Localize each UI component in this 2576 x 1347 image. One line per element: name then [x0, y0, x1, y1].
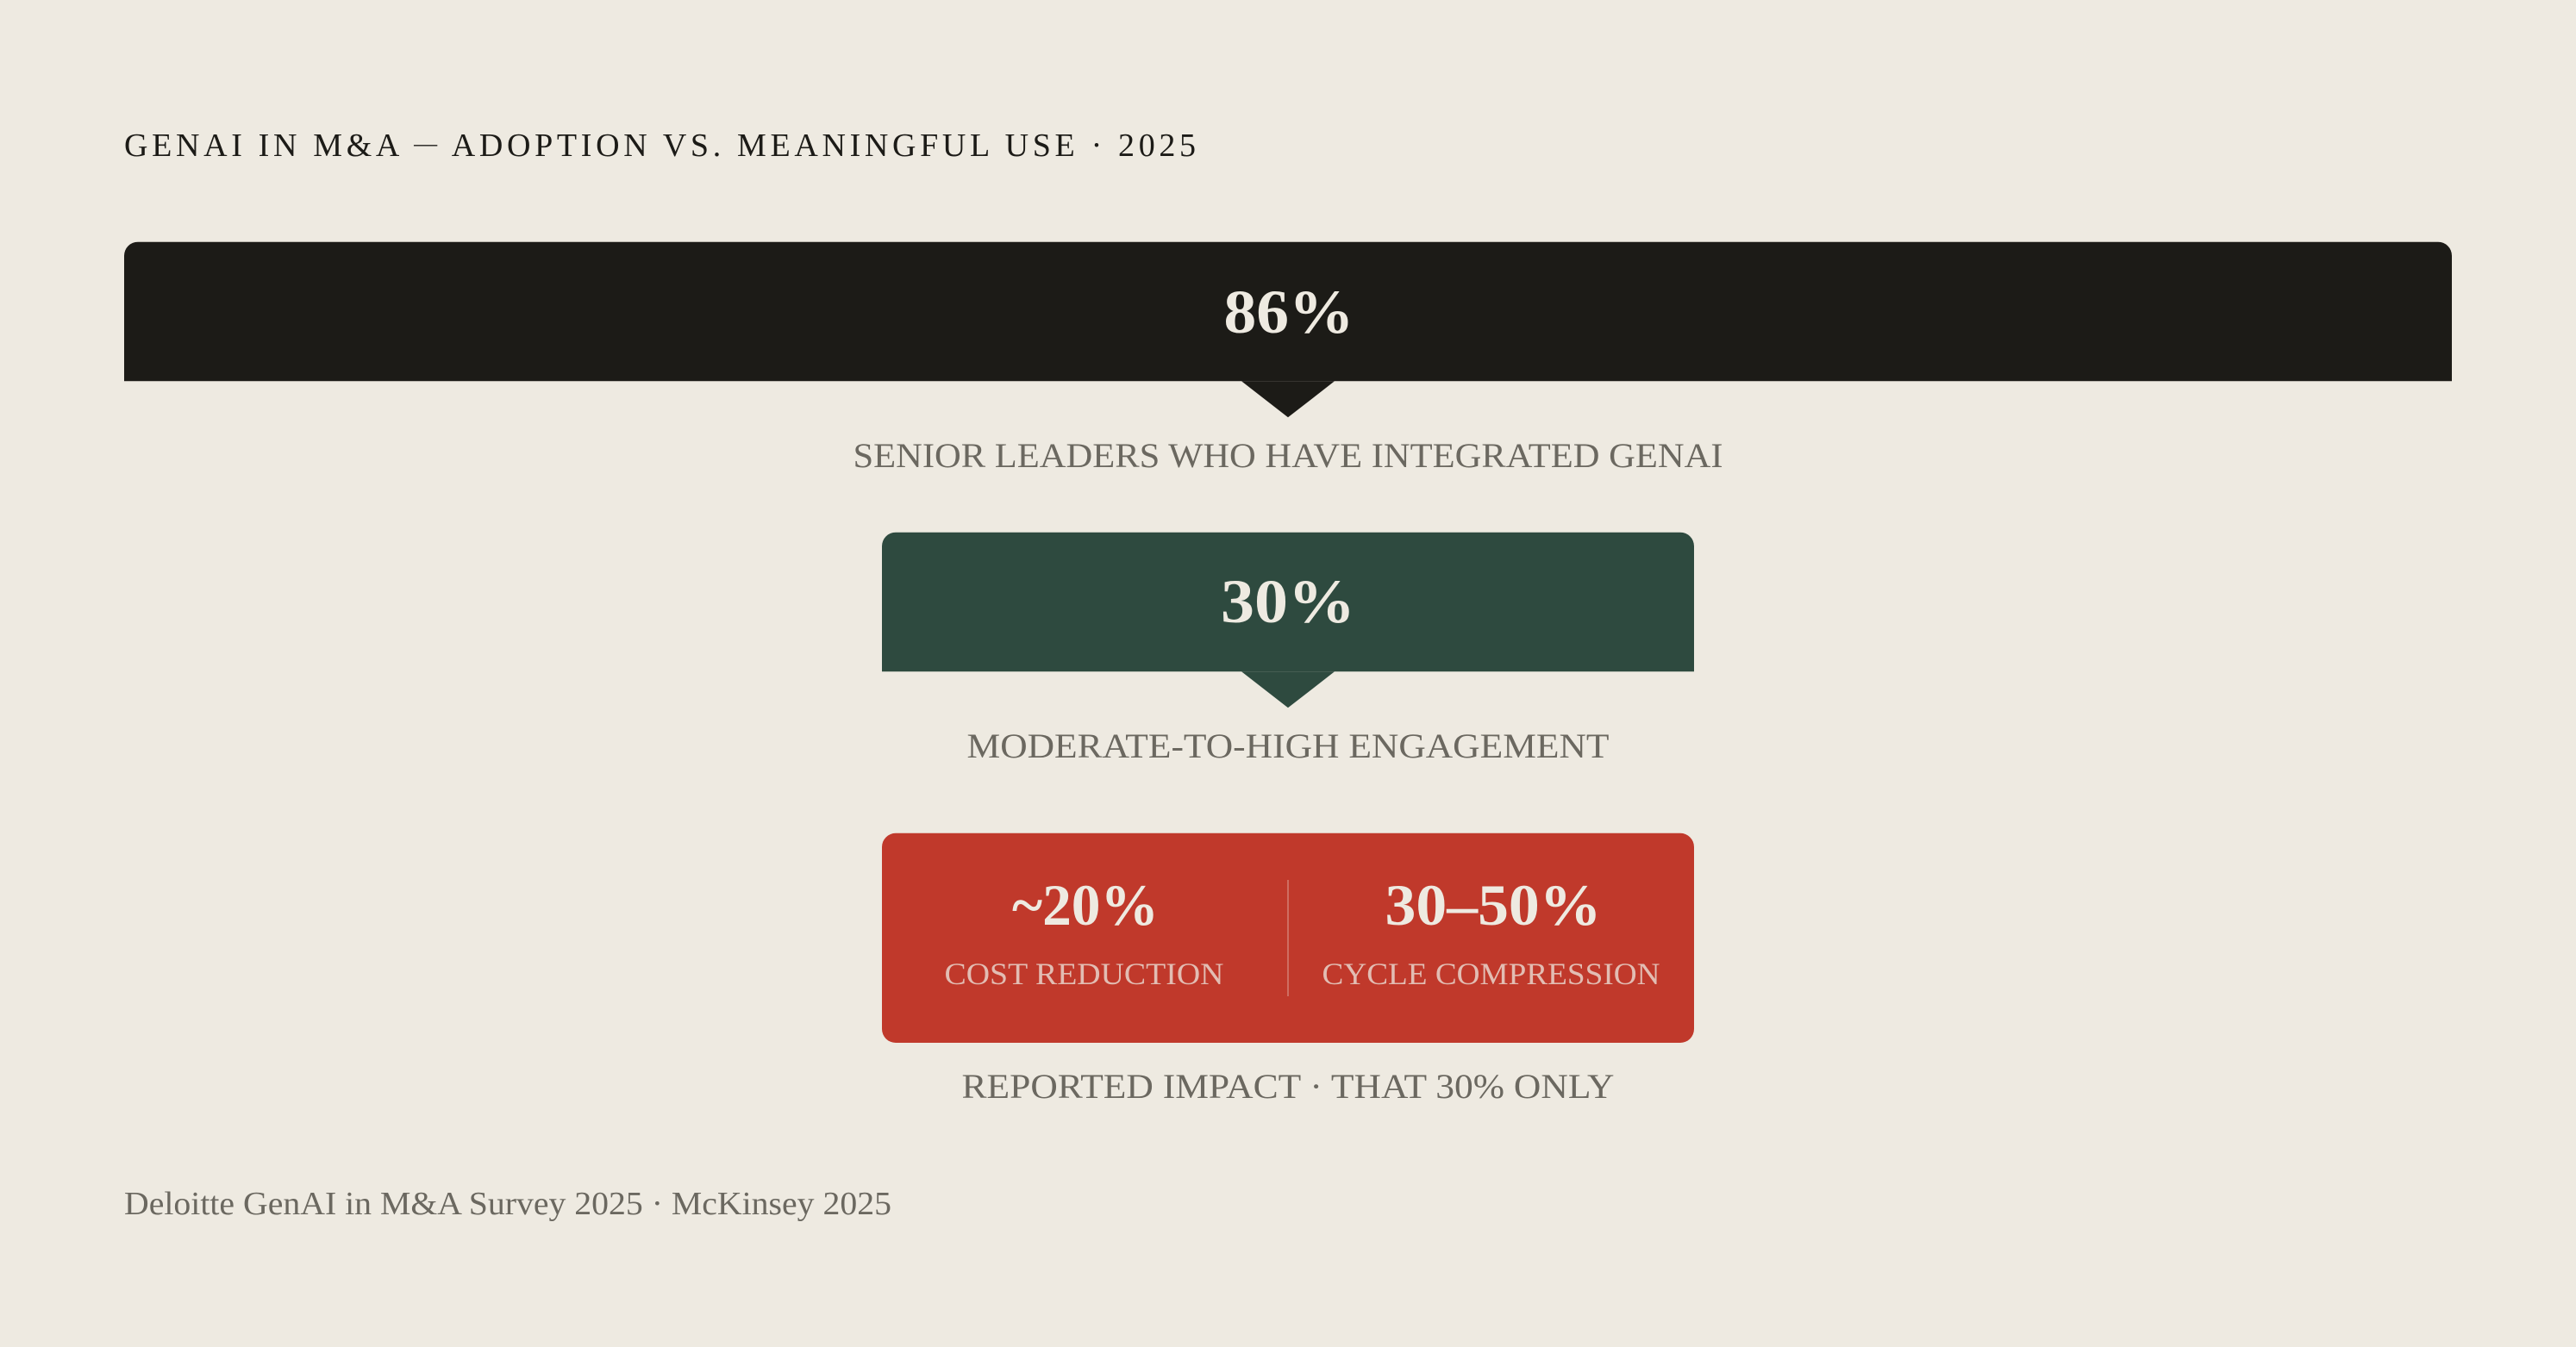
- card background: [882, 833, 1694, 1043]
- divider: [1287, 880, 1289, 996]
- title: —: [413, 130, 438, 156]
- value: ~20%: ~20%: [1012, 872, 1159, 938]
- title: ADOPTION VS. MEANINGFUL USE · 2025: [441, 128, 1196, 164]
- label: senior leaders: SENIOR LEADERS WHO HAVE INTEGRATED GENAI: [853, 436, 1723, 475]
- arrow: engagement down: [1241, 671, 1335, 708]
- stat: 86%: 86%: [1224, 278, 1354, 346]
- caption: cost reduction: COST REDUCTION: [945, 957, 1224, 991]
- caption: cycle compression: CYCLE COMPRESSION: [1322, 957, 1660, 991]
- bar shape: engagement: [882, 533, 1694, 671]
- bar shape: adoption: [124, 242, 2452, 381]
- stat: 30%: 30%: [1221, 567, 1355, 636]
- title: GENAI IN M&A: [124, 128, 397, 164]
- label: moderate-to-high engagement: MODERATE-TO-HIGH ENGAGEMENT: [967, 727, 1609, 765]
- source footnote: Deloitte GenAI in M&A Survey 2025 · McKinsey 2025: [124, 1186, 891, 1222]
- label: reported impact: REPORTED IMPACT · THAT 30% ONLY: [962, 1067, 1614, 1106]
- arrow: adoption down: [1241, 381, 1335, 417]
- stat: cycle compression: [1322, 872, 1660, 991]
- stat: cost reduction: [945, 872, 1224, 991]
- value: 30–50%: 30–50%: [1385, 872, 1602, 938]
- panel: reported impact: [882, 833, 1694, 1043]
- panel: 30% engagement bar: [882, 533, 1694, 708]
- panel: 86% senior leaders bar: [124, 242, 2452, 417]
